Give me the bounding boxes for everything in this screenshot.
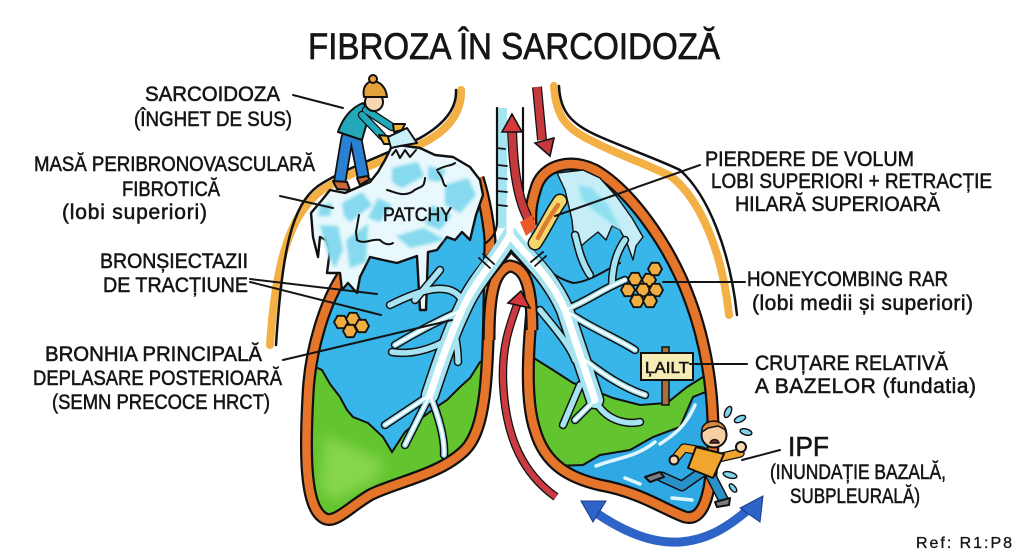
sign post	[641, 347, 693, 405]
label: fibrotic peribronchovascular mass: (lobi superiori)	[62, 201, 207, 224]
label: main bronchus	[33, 343, 282, 414]
left honeycomb icon	[334, 313, 369, 337]
label: traction bronchiectasis	[100, 250, 248, 297]
label: honeycombing: HONEYCOMBING RAR	[747, 268, 948, 291]
ice label: PATCHY	[383, 205, 452, 226]
runner shirt	[688, 447, 724, 478]
airway black outline	[385, 235, 645, 455]
label: main bronchus: (SEMN PRECOCE HRCT)	[52, 391, 270, 414]
label: volume loss: HILARĂ SUPERIOARĂ	[735, 193, 940, 216]
right lung	[525, 164, 725, 530]
runner head	[702, 422, 726, 448]
airway white highlight	[385, 200, 645, 455]
climber boots	[333, 181, 350, 190]
red arrow down toward hilum	[537, 87, 542, 140]
blue double arrow	[581, 496, 763, 542]
label: honeycombing	[747, 268, 973, 315]
runner legs	[662, 472, 724, 501]
ice chunk	[388, 128, 417, 148]
runner arms	[674, 448, 740, 460]
trachea and airway tree	[385, 108, 645, 455]
left lung pleural band	[306, 178, 490, 519]
label: IPF: IPF	[788, 431, 829, 462]
heart notch arch	[489, 266, 532, 340]
label: traction bronchiectasis: DE TRACȚIUNE	[103, 274, 248, 297]
label: fibrotic peribronchovascular mass	[34, 153, 315, 224]
left lung blue tissue	[306, 160, 490, 519]
left lung light streaks	[320, 435, 385, 500]
label: fibrotic peribronchovascular mass: MASĂ PERIBRONOVASCULARĂ	[34, 153, 315, 176]
right honeycomb icon	[621, 263, 663, 307]
climber arms	[362, 110, 392, 136]
basal water flood	[566, 392, 706, 511]
label: fibrotic peribronchovascular mass: FIBROTICĂ	[122, 178, 220, 201]
right shoulder outline	[554, 86, 737, 315]
yellow hilar retraction	[535, 201, 560, 243]
right lung pleural band	[528, 164, 713, 518]
trachea pale fill	[498, 108, 523, 232]
label: sarcoidoza: SARCOIDOZA	[145, 83, 280, 106]
icon: climber on ice	[333, 75, 417, 190]
label: IPF: (INUNDAȚIE BAZALĂ,	[770, 461, 946, 484]
runner hands	[670, 456, 678, 464]
sweat drops	[722, 405, 753, 493]
climber hat	[364, 81, 387, 97]
tracheal wall and rings	[479, 108, 546, 268]
left lung green base	[312, 360, 481, 513]
label: volume loss	[705, 148, 992, 216]
label: honeycombing: (lobi medii și superiori)	[752, 292, 973, 315]
right lung green base	[534, 358, 704, 465]
label: IPF	[770, 431, 946, 508]
right lung blue tissue	[528, 164, 713, 518]
lower red arrow	[503, 291, 556, 497]
red arrow up along trachea	[512, 128, 530, 222]
left shoulder outline	[270, 90, 461, 345]
airway light-blue core	[385, 235, 645, 455]
ice blue patches	[318, 162, 476, 268]
label: main bronchus: BRONHIA PRINCIPALĂ	[45, 343, 262, 366]
label: traction bronchiectasis: BRONȘIECTAZII	[100, 250, 248, 273]
label: main bronchus: DEPLASARE POSTERIOARĂ	[33, 367, 282, 390]
left lung	[300, 160, 495, 540]
upper red arrows and retraction	[502, 87, 560, 243]
label: sarcoidoza: (ÎNGHET DE SUS)	[134, 108, 292, 131]
climber hands	[393, 124, 405, 132]
climber torso	[338, 103, 370, 140]
label: volume loss: PIERDERE DE VOLUM	[705, 148, 914, 171]
right lung upper ice	[557, 170, 643, 260]
label: sarcoidoza	[134, 83, 292, 131]
label: relative base sparing: CRUȚARE RELATIVĂ	[755, 352, 948, 375]
label: relative base sparing	[755, 352, 976, 398]
left upper lobe ice cap	[311, 145, 483, 310]
water highlights	[596, 405, 695, 500]
reference note: Ref: R1:P8	[916, 535, 1012, 552]
label: volume loss: LOBI SUPERIORI + RETRACȚIE	[711, 170, 992, 193]
sign post: ĻAILT	[645, 360, 689, 377]
label: relative base sparing: A BAZELOR (fundatia)	[755, 375, 976, 398]
icon: running person	[645, 405, 753, 507]
ice crack lines	[387, 178, 425, 194]
label: IPF: SUBPLEURALĂ)	[790, 485, 920, 508]
runner shoes	[645, 472, 664, 482]
leader lines	[250, 95, 780, 460]
ice patches right	[578, 185, 622, 232]
title: FIBROZA ÎN SARCOIDOZĂ	[308, 26, 720, 67]
climber face	[365, 93, 383, 111]
climber legs	[340, 138, 363, 180]
